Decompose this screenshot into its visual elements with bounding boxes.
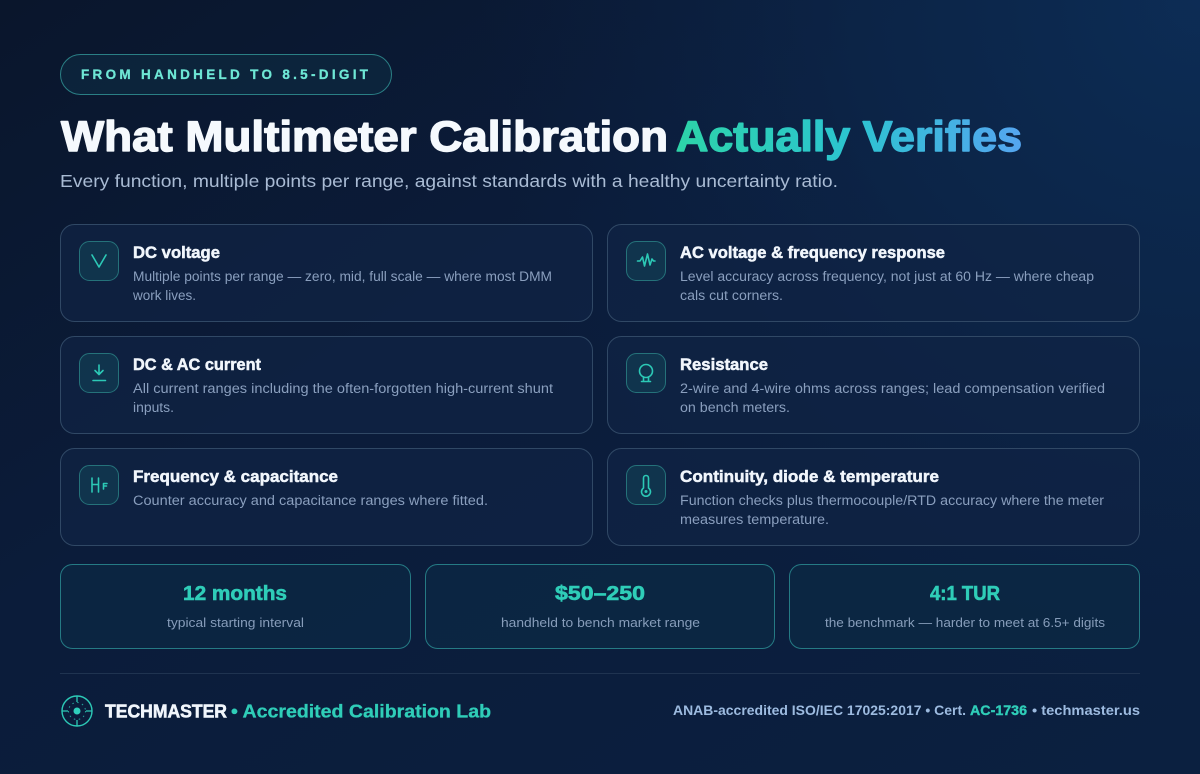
- stat: price range: handheld to bench market range: [501, 615, 700, 630]
- panel: DC voltage: Multiple points per range — zero, mid, full scale — where most DMM: [133, 269, 552, 284]
- stat: price range: $50–250: [555, 582, 645, 605]
- icon: waveform: [626, 242, 666, 280]
- panel: Continuity, diode and temperature: [608, 448, 1140, 546]
- footer brand: • Accredited Calibration Lab: [231, 700, 491, 722]
- panel: Resistance: [608, 336, 1140, 434]
- panel: Continuity, diode and temperature: Function checks plus thermocouple/RTD accuracy where the meter: [680, 493, 1105, 508]
- stat: TUR: [790, 564, 1140, 648]
- stat: 12 months: typical starting interval: [167, 615, 304, 630]
- footer accreditation: ANAB-accredited ISO/IEC 17025:2017 • Cert.: [673, 702, 966, 718]
- panel: DC voltage: work lives.: [132, 288, 196, 303]
- pill badge: FROM HANDHELD TO 8.5-DIGIT: [81, 67, 369, 82]
- panel: DC and AC current: DC & AC current: [133, 356, 261, 374]
- panel: Resistance: on bench meters.: [680, 400, 790, 415]
- panel: Resistance: Resistance: [680, 356, 768, 374]
- footer accreditation: AC-1736: [970, 702, 1027, 718]
- footer brand: TECHMASTER: [105, 700, 227, 722]
- stat: price range: [426, 564, 774, 648]
- panel: AC voltage and frequency response: cals cut corners.: [680, 288, 783, 303]
- subtitle: Every function, multiple points per range, against standards with a healthy uncertainty ratio.: [60, 171, 838, 191]
- icon: ohm bulb: [626, 354, 666, 392]
- icon: thermometer: [626, 466, 666, 504]
- panel: DC voltage: DC voltage: [133, 244, 220, 262]
- icon: Hz F glyph: [80, 466, 118, 504]
- footer accreditation: [673, 702, 1140, 718]
- panel: AC voltage and frequency response: AC voltage & frequency response: [680, 244, 945, 262]
- title: [61, 113, 1022, 161]
- panel: Resistance: 2-wire and 4-wire ohms across ranges; lead compensation verified: [680, 381, 1105, 396]
- panel: DC voltage: [60, 224, 592, 322]
- panel: DC and AC current: All current ranges including the often-forgotten high-current shunt: [133, 381, 553, 396]
- panel: DC and AC current: [60, 336, 592, 434]
- stat: 12 months: [60, 564, 410, 648]
- footer accreditation: • techmaster.us: [1032, 702, 1140, 718]
- panel: Frequency and capacitance: Frequency & capacitance: [133, 468, 338, 486]
- panel: AC voltage and frequency response: [608, 224, 1140, 322]
- icon: down arrow over line: [80, 354, 118, 392]
- panel: Frequency and capacitance: [60, 448, 592, 546]
- panel: Continuity, diode and temperature: measures temperature.: [680, 512, 829, 527]
- stat: TUR: the benchmark — harder to meet at 6.5+ digits: [825, 615, 1106, 630]
- panel: Frequency and capacitance: Counter accuracy and capacitance ranges where fitted.: [133, 493, 488, 508]
- stat: TUR: 4:1 TUR: [930, 582, 1000, 605]
- footer brand: [105, 700, 491, 722]
- panel: AC voltage and frequency response: Level accuracy across frequency, not just at 60 Hz — where cheap: [680, 269, 1094, 284]
- title: Actually Verifies: [676, 113, 1022, 161]
- pill badge: [60, 54, 392, 94]
- icon: logo crosshair: [62, 696, 92, 726]
- stat: 12 months: 12 months: [183, 582, 287, 605]
- icon: chevron V: [80, 242, 118, 280]
- panel: Continuity, diode and temperature: Continuity, diode & temperature: [680, 468, 939, 486]
- panel: DC and AC current: inputs.: [133, 400, 174, 415]
- title: What Multimeter Calibration: [61, 113, 668, 161]
